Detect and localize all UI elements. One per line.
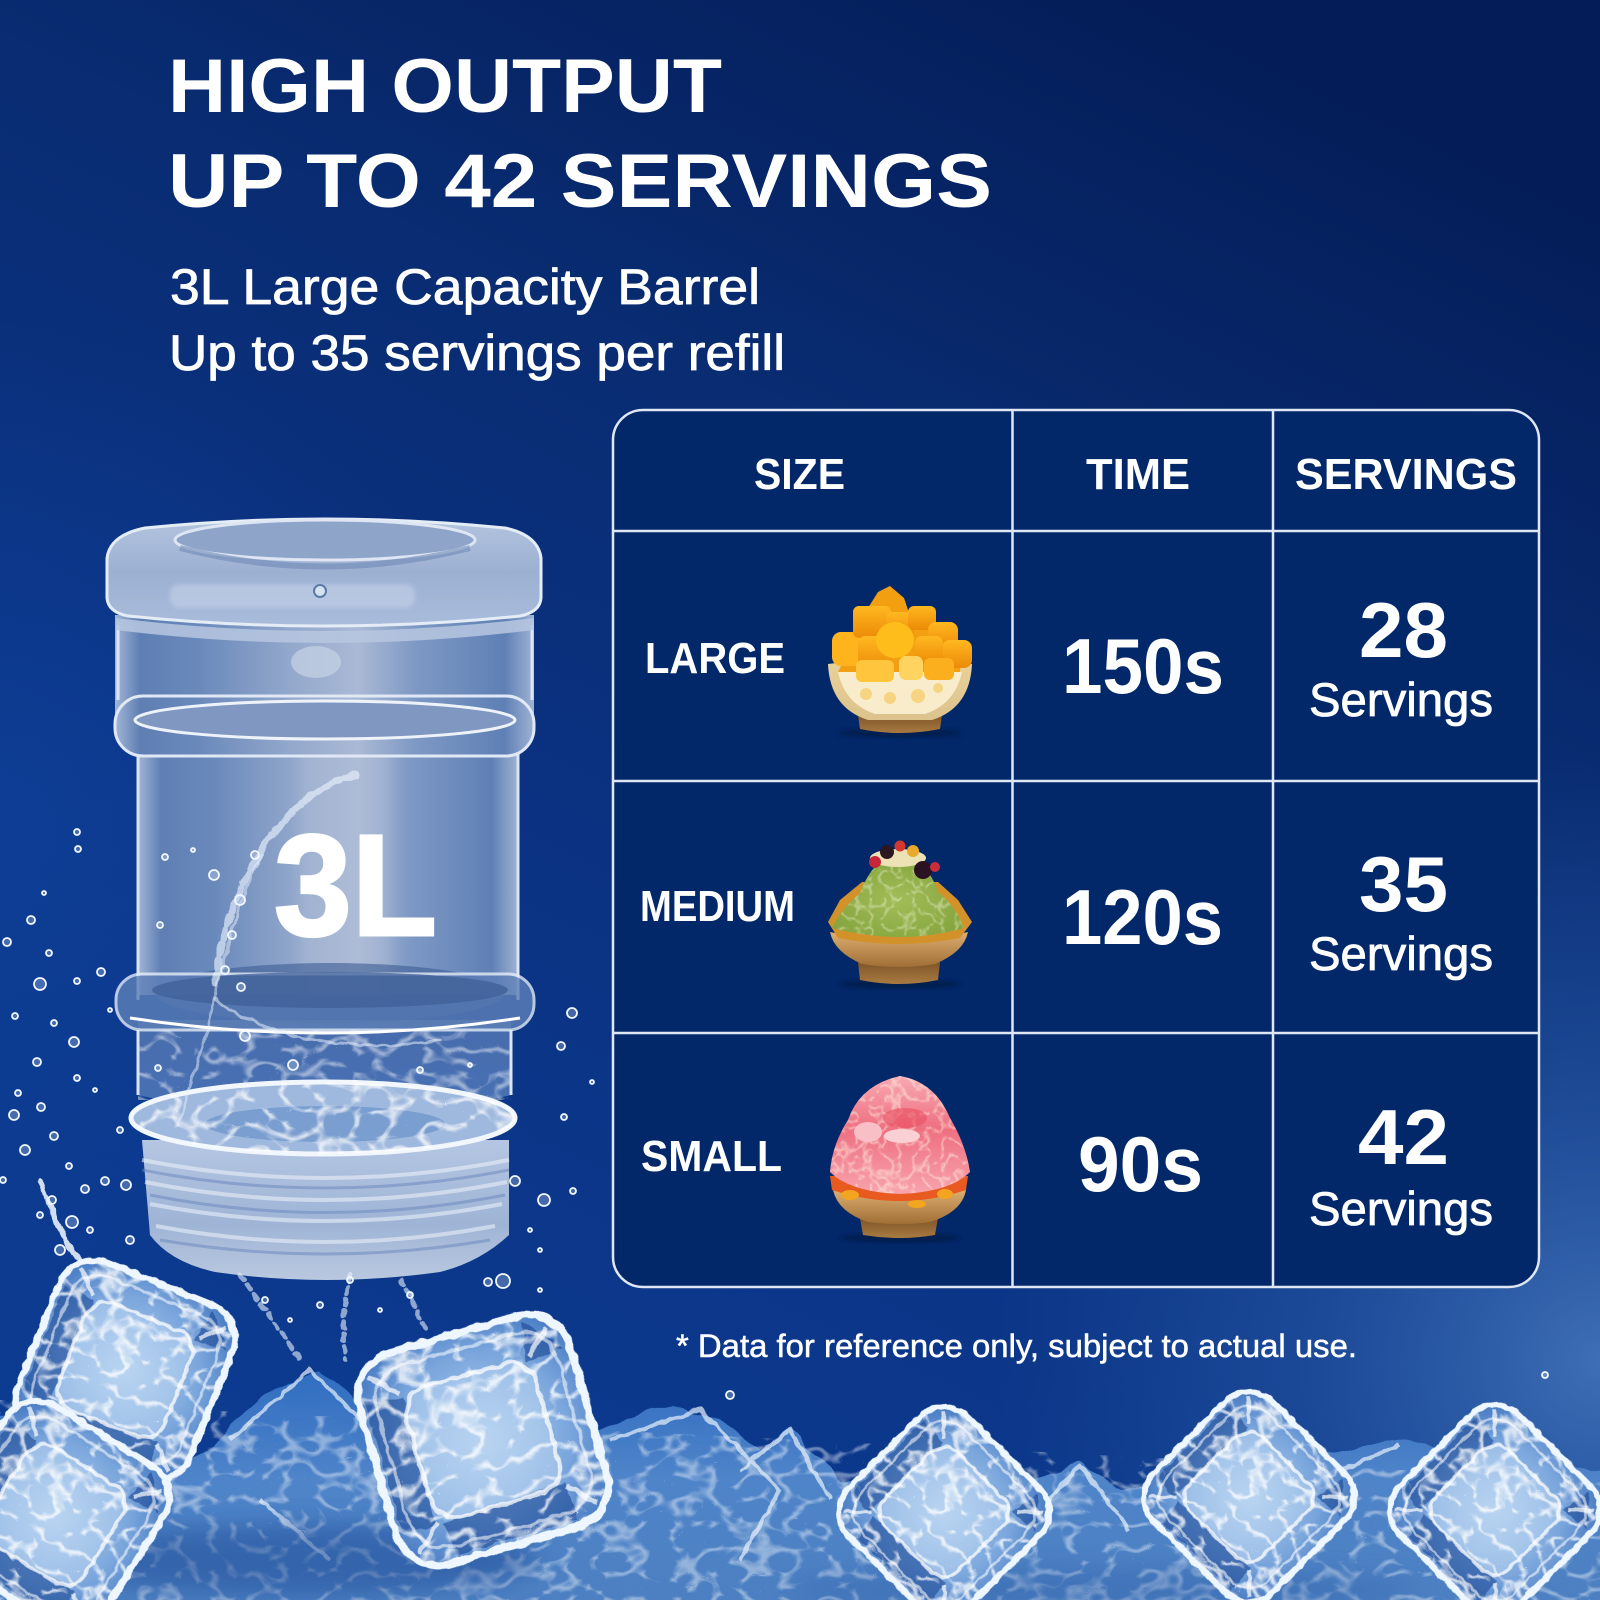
- subtitle: Up to 35 servings per refill: [169, 325, 785, 381]
- row: small: SMALL: [641, 1132, 782, 1181]
- row: medium: MEDIUM: [640, 882, 795, 931]
- 3L label: 3L: [274, 805, 437, 966]
- serving counts: 35: [1359, 840, 1448, 928]
- 3L barrel: [107, 519, 541, 1280]
- serving counts: 42: [1358, 1093, 1449, 1181]
- row: small: [641, 1076, 970, 1243]
- icon: strawberry shaved ice bowl: [830, 1076, 970, 1243]
- ice cube: large center: [344, 1301, 622, 1579]
- serving counts: Servings: [1309, 1182, 1493, 1235]
- subtitle: [169, 259, 785, 381]
- footnote: * Data for reference only, subject to actual use.: [676, 1328, 1357, 1364]
- threaded base: [142, 1140, 509, 1280]
- mid ring: [115, 696, 534, 756]
- table frame and grid: [613, 410, 1539, 1287]
- base plate: [131, 1082, 515, 1154]
- ice cube: bottom right: [1373, 1388, 1600, 1600]
- capacity table: [613, 410, 1539, 1287]
- main body: [115, 615, 534, 1023]
- lid: [107, 519, 541, 643]
- title: HIGH OUTPUT: [168, 44, 722, 129]
- row: medium: [640, 840, 972, 989]
- table header: [754, 450, 1517, 499]
- serving counts: Servings: [1309, 673, 1493, 726]
- ice cube: upper left: [1, 1246, 249, 1494]
- icon: mango shaved ice bowl: [828, 586, 972, 738]
- splash streams: [40, 775, 440, 1360]
- title: [168, 44, 992, 224]
- time values: 90s: [1078, 1120, 1203, 1208]
- table header: SIZE: [754, 450, 845, 499]
- ice cube: bottom center: [822, 1390, 1066, 1600]
- row: large: LARGE: [645, 634, 785, 683]
- subtitle: 3L Large Capacity Barrel: [170, 259, 760, 315]
- time values: 120s: [1062, 873, 1223, 961]
- crushed ice bed: [0, 1370, 1600, 1600]
- ice cube: lower left: [0, 1384, 186, 1600]
- title: UP TO 42 SERVINGS: [168, 139, 992, 224]
- time values: [1062, 622, 1224, 1208]
- table header: SERVINGS: [1295, 450, 1517, 499]
- table header: TIME: [1086, 450, 1190, 499]
- serving counts: Servings: [1309, 927, 1493, 980]
- droplets: [0, 829, 1548, 1399]
- lower body: [138, 1020, 511, 1118]
- serving counts: 28: [1359, 586, 1448, 674]
- ice cubes: [0, 1246, 1600, 1600]
- row: large: [645, 586, 972, 738]
- serving counts: [1309, 586, 1493, 1235]
- time values: 150s: [1062, 622, 1224, 710]
- lower ring: [116, 972, 534, 1033]
- icon: matcha shaved ice bowl: [828, 840, 972, 989]
- water splash: [0, 775, 1548, 1399]
- ice cube: bottom right center: [1127, 1375, 1371, 1600]
